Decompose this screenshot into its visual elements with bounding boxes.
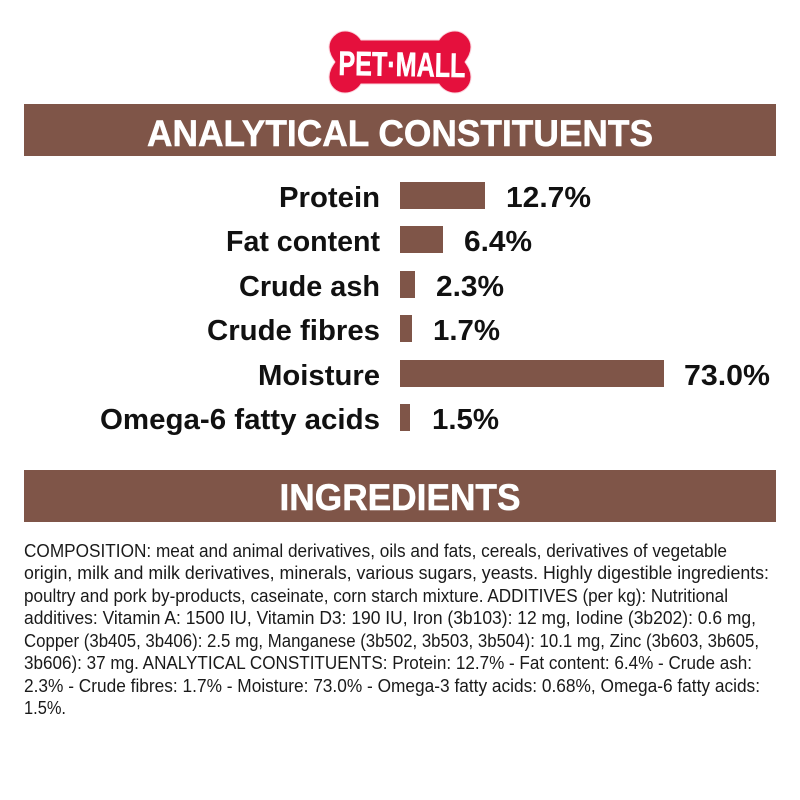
heading banner: ingredients: INGREDIENTS xyxy=(280,477,520,518)
row: crude ash xyxy=(239,271,504,303)
text block: composition: poultry and pork by-products, caseinate, corn starch mixture. ADDITIVES (per kg): Nutritional xyxy=(24,586,728,606)
row: protein: 12.7% xyxy=(506,182,591,214)
heading banner: analytical constituents: ANALYTICAL CONSTITUENTS xyxy=(147,113,653,154)
row: omega-6 fatty acids xyxy=(100,404,499,436)
row: protein: Protein xyxy=(279,182,380,214)
row: omega-6 fatty acids: 1.5% xyxy=(432,404,499,436)
logo: Pet-Mall bone xyxy=(329,31,471,93)
row: crude fibres: Crude fibres xyxy=(207,315,380,347)
row: omega-6 fatty acids: Omega-6 fatty acids xyxy=(100,404,380,436)
row: protein xyxy=(279,182,591,214)
row: fat content xyxy=(226,226,532,258)
heading banner: ingredients xyxy=(24,470,776,522)
text block: composition: COMPOSITION: meat and animal derivatives, oils and fats, cereals, derivatives of vegetable xyxy=(24,541,727,561)
heading banner: analytical constituents xyxy=(24,104,776,156)
row: crude ash: Crude ash xyxy=(239,271,380,303)
text block: composition: additives: Vitamin A: 1500 IU, Vitamin D3: 190 IU, Iron (3b103): 12 mg, Iodine (3b202): 0.6 mg, xyxy=(24,608,756,628)
text block: composition: 1.5%. xyxy=(24,698,66,718)
text block: composition: Copper (3b405, 3b406): 2.5 mg, Manganese (3b502, 3b503, 3b504): 10.1 mg, Zinc (3b603, 3b605, xyxy=(24,631,759,651)
bar chart: analytical constituents xyxy=(100,182,770,436)
row: crude ash: 2.3% xyxy=(436,271,504,303)
row: crude fibres xyxy=(207,315,500,347)
row: fat content: 6.4% xyxy=(464,226,532,258)
row: moisture: 73.0% xyxy=(684,360,770,392)
text block: composition: 3b606): 37 mg. ANALYTICAL CONSTITUENTS: Protein: 12.7% - Fat content: 6.4% - Crude ash: xyxy=(24,653,752,673)
row: fat content: Fat content xyxy=(226,226,380,258)
text block: composition: origin, milk and milk derivatives, minerals, various sugars, yeasts. Highly digestible ingredients: xyxy=(24,563,769,583)
text block: composition: 2.3% - Crude fibres: 1.7% - Moisture: 73.0% - Omega-3 fatty acids: 0.68%, Omega-6 fatty acids: xyxy=(24,676,760,696)
text block: composition xyxy=(24,541,769,718)
row: crude fibres: 1.7% xyxy=(433,315,500,347)
row: moisture: Moisture xyxy=(258,360,380,392)
logo: Pet-Mall bone: PET·MALL xyxy=(338,45,466,85)
row: moisture xyxy=(258,360,770,392)
